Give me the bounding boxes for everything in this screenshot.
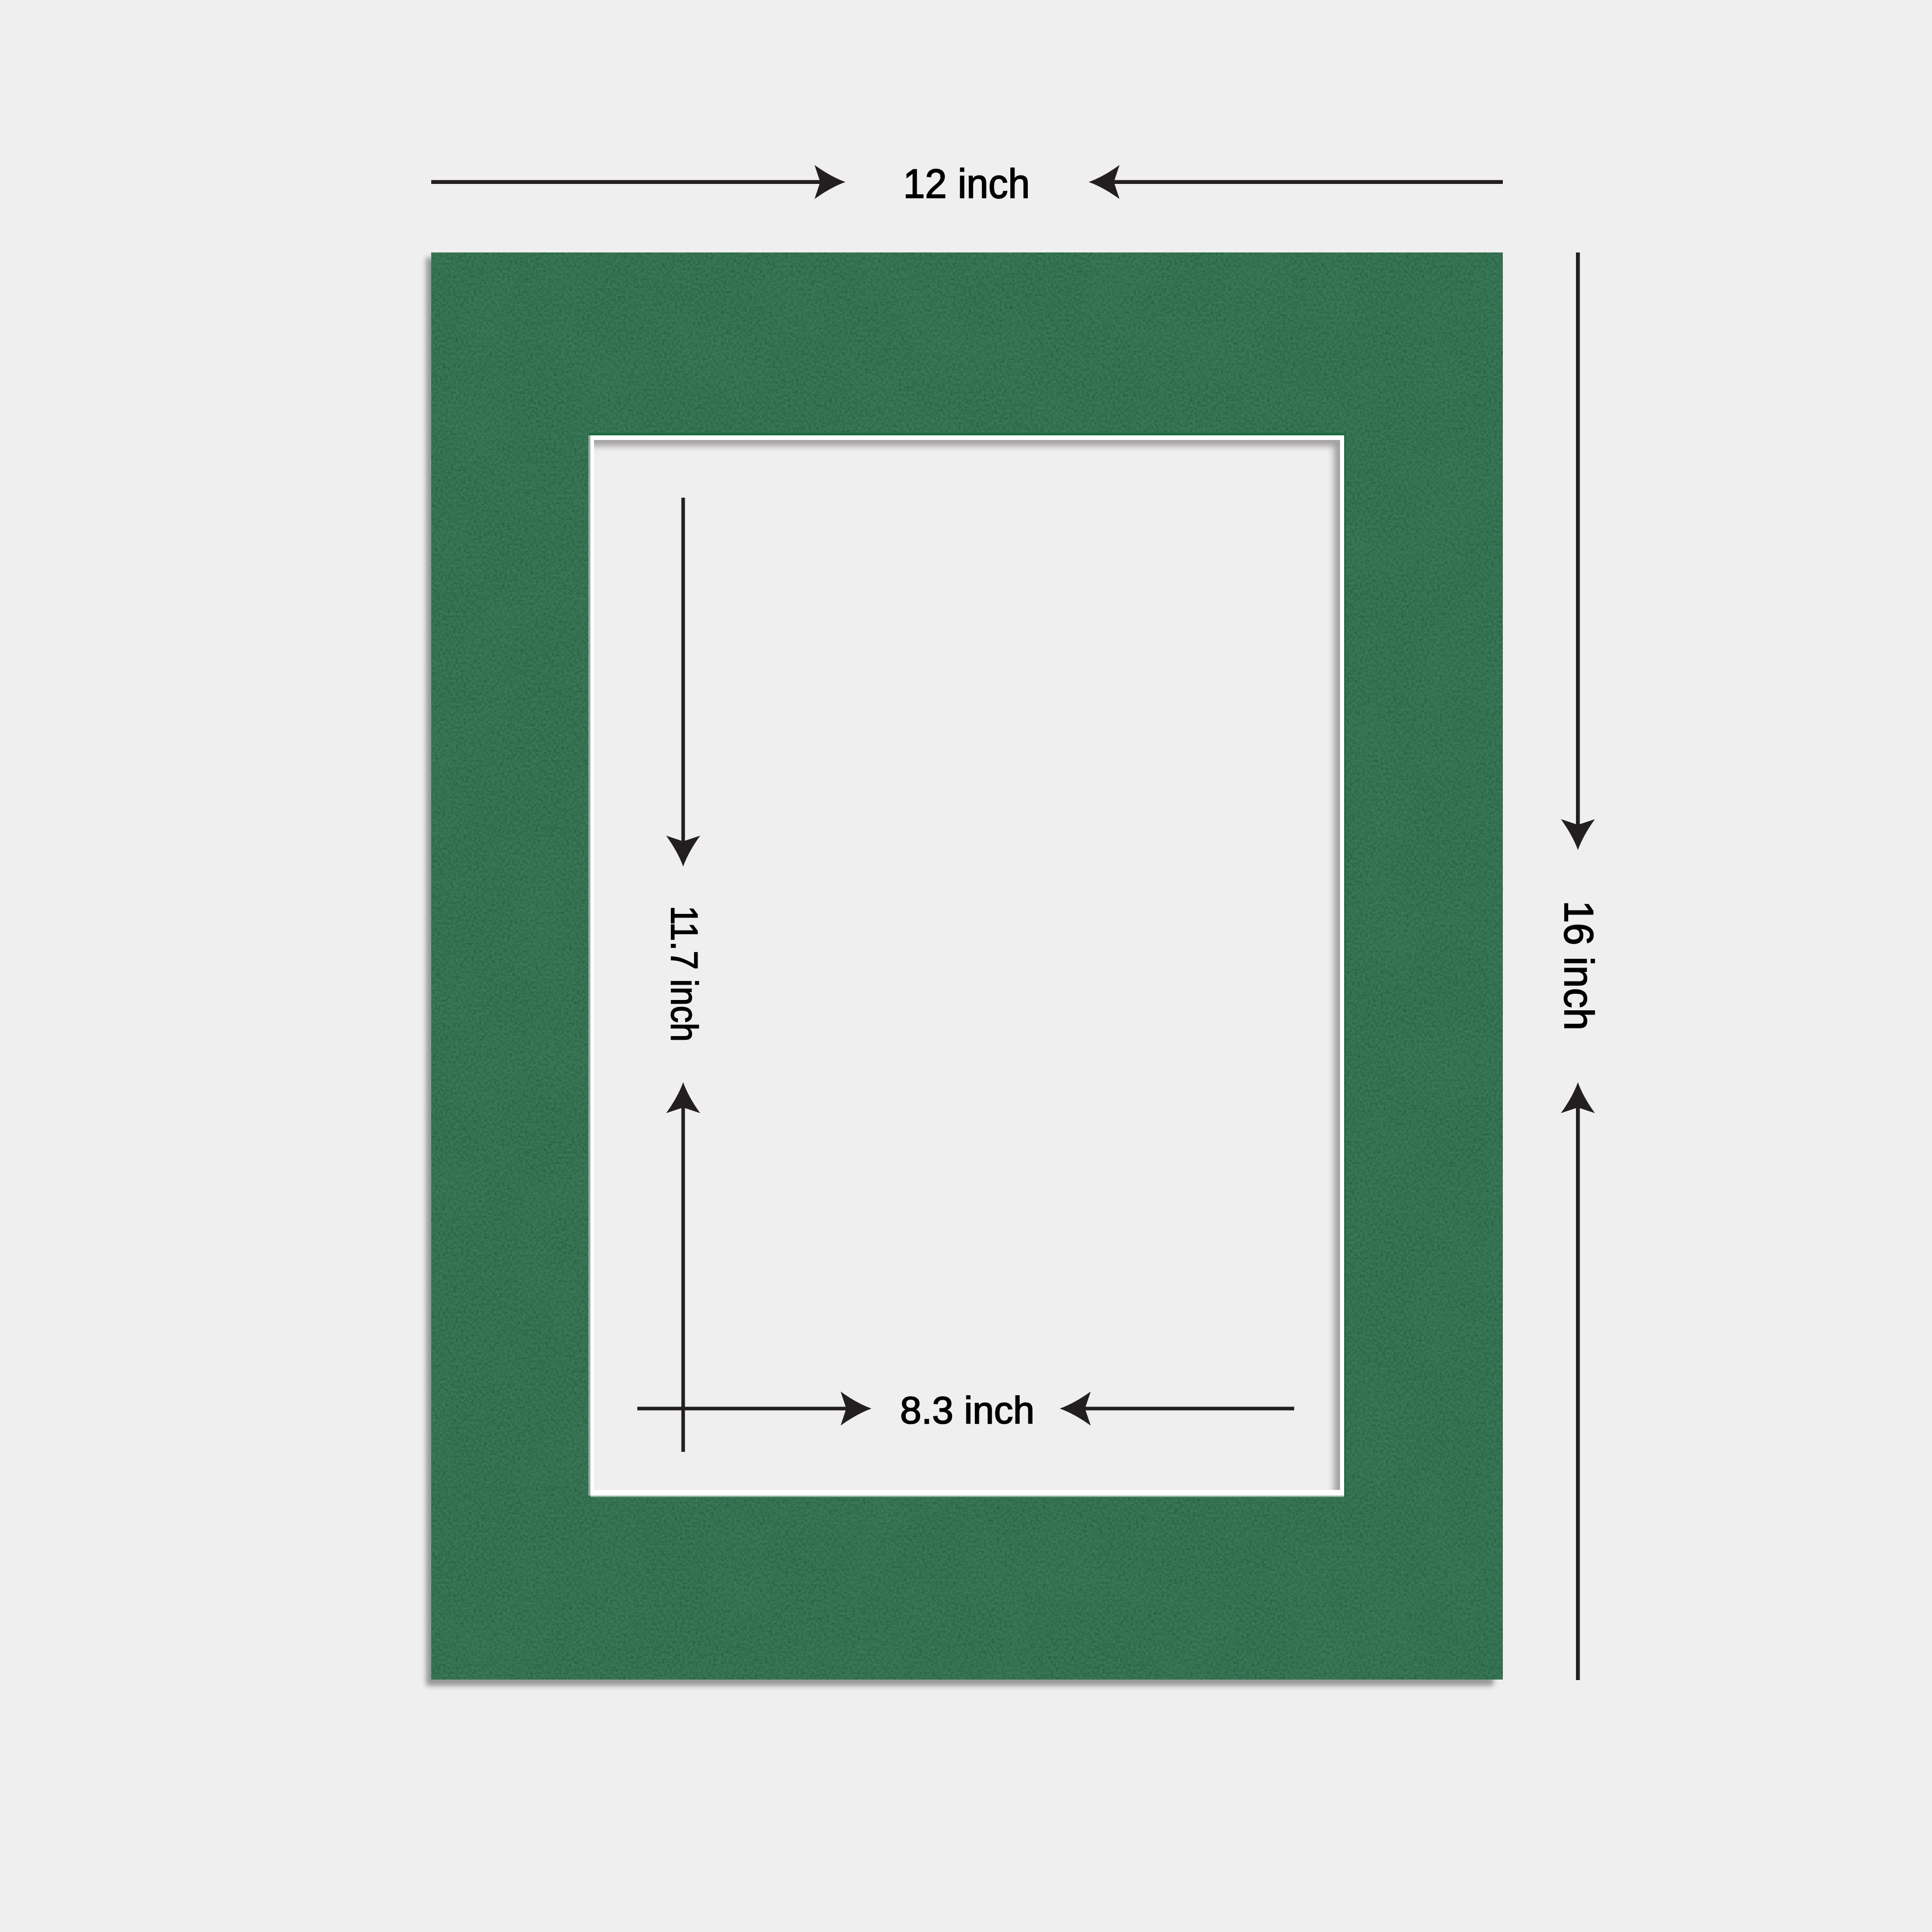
arrow: outer height top: [1561, 252, 1595, 850]
window opening: [594, 440, 1340, 1490]
mat board fine grain: [431, 252, 1503, 1680]
label: outer width: 12 inch: [903, 161, 1030, 207]
arrow: inner height top: [666, 498, 700, 867]
label: inner height: 11.7 inch: [663, 906, 705, 1042]
arrow: outer width right: [1089, 165, 1503, 199]
mat board drop shadow: [426, 258, 1494, 1686]
window inner shadow: [582, 435, 1345, 1504]
mat board mottling: [431, 252, 1503, 1680]
window bevel edge: [588, 433, 1346, 1498]
white bevel: [590, 435, 1344, 1496]
arrow: outer width left: [431, 165, 845, 199]
mat board dimension diagram: [423, 165, 1595, 1689]
arrow: inner height bottom: [666, 1082, 700, 1452]
label: inner width: 8.3 inch: [900, 1389, 1035, 1432]
label: outer height: 16 inch: [1556, 901, 1602, 1030]
panel: green mat board with window: [431, 252, 1503, 1680]
arrow: outer height bottom: [1561, 1082, 1595, 1680]
arrow: inner width right: [1060, 1392, 1294, 1426]
arrow: inner width left: [637, 1392, 872, 1426]
mat board paper: [431, 252, 1503, 1680]
